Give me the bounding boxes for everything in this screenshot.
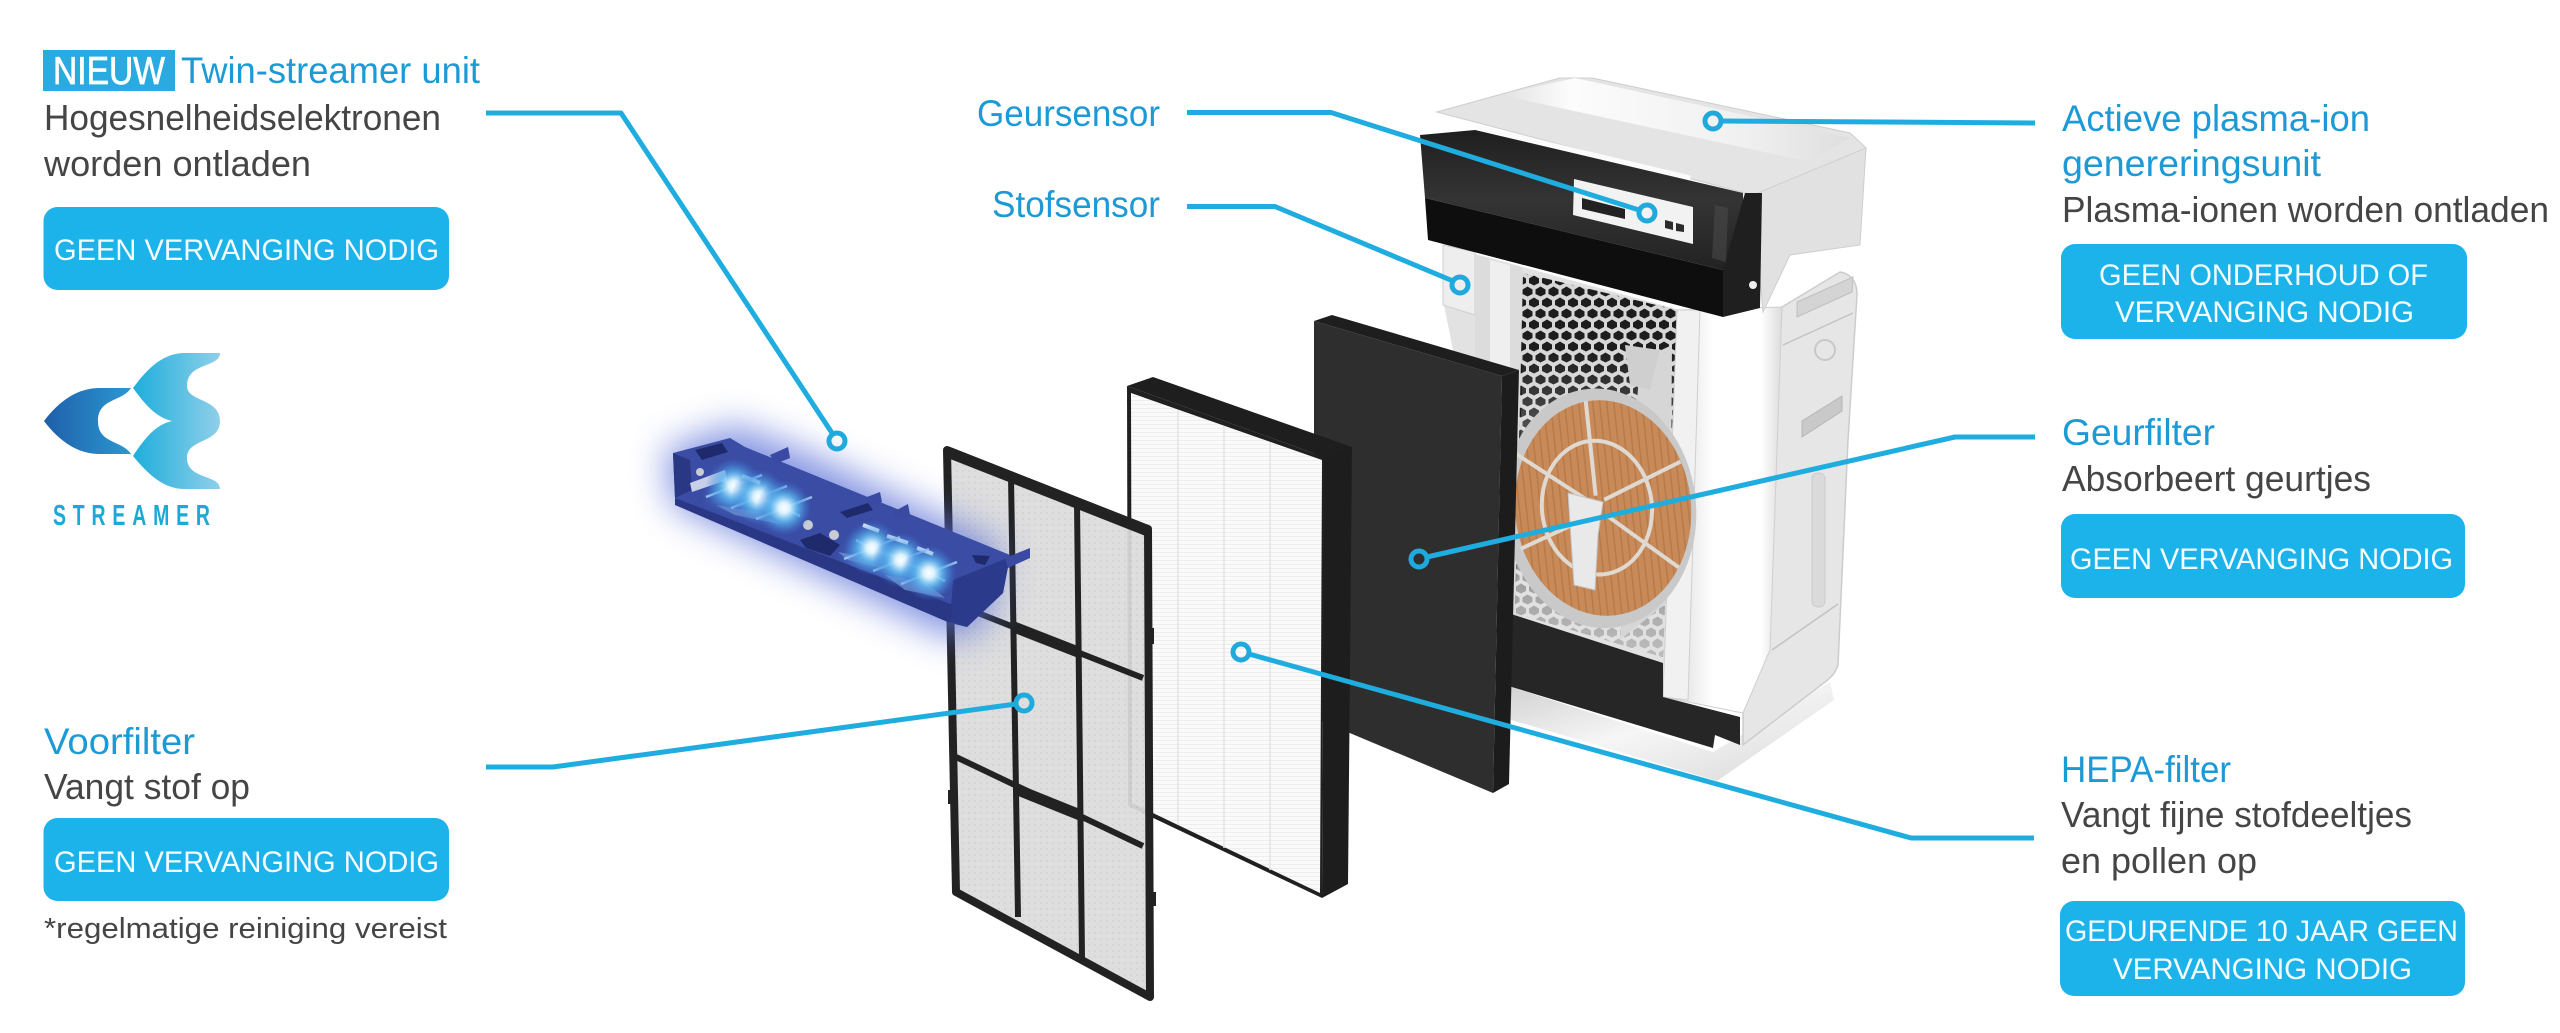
streamer slots: [695, 443, 990, 565]
streamer right end: [950, 557, 1010, 627]
button: VERVANGING NODIG: [2115, 296, 2414, 329]
display panel: [1573, 179, 1693, 244]
streamer pins: [696, 468, 839, 540]
odour filter disc: [1492, 379, 1708, 638]
leader line: geursensor: [1187, 112, 1655, 221]
button: GEDURENDE 10 JAAR GEEN: [2065, 915, 2458, 948]
streamer body: [673, 438, 1010, 627]
illustration: carbon odour filter: [1314, 315, 1519, 793]
heading: Twin-streamer unit: [181, 50, 481, 91]
description: Plasma-ionen worden ontladen: [2062, 189, 2549, 230]
label: stofsensor: Stofsensor: [992, 184, 1160, 225]
HEPA front frame: [1127, 386, 1324, 898]
HEPA side frame: [1322, 447, 1352, 898]
streamer light stars: [706, 458, 957, 601]
lid recess: [1500, 78, 1850, 162]
button: VERVANGING NODIG: [2113, 953, 2412, 986]
right interior strip: [1663, 310, 1700, 700]
heading: Actieve plasma-ion: [2062, 98, 2370, 139]
illustration: pre-filter: [947, 450, 1156, 997]
leader line: plasma-ion: [1705, 113, 2035, 129]
pre-filter thick segments: [950, 453, 1148, 815]
logo right fins: [133, 353, 220, 489]
button: GEEN ONDERHOUD OF: [2099, 259, 2428, 292]
heading: genereringsunit: [2062, 143, 2322, 184]
hexagonal mesh: [1515, 273, 1677, 657]
button: [44, 818, 449, 901]
side handles and seams: [1772, 277, 1853, 650]
HEPA top frame: [1127, 377, 1352, 457]
label: geursensor: Geursensor: [977, 93, 1160, 134]
callout: voorfilter: [44, 721, 449, 945]
streamer tabs: [770, 447, 1030, 568]
logo wordmark: STREAMER: [53, 501, 210, 532]
lid top surface: [1437, 78, 1866, 195]
hinge screw: [1749, 281, 1757, 289]
streamer glow: [665, 425, 1000, 640]
black head upper: [1420, 130, 1745, 270]
purifier side panel: [1743, 272, 1857, 745]
heading: HEPA-filter: [2061, 749, 2231, 790]
illustration: twin-streamer unit: [665, 425, 1030, 640]
leader line: HEPA-filter: [1233, 644, 2034, 838]
heading: Voorfilter: [44, 721, 195, 762]
carbon front face: [1314, 321, 1502, 793]
duct bracket: [1620, 345, 1672, 640]
description: Hogesnelheidselektronen: [44, 97, 441, 138]
streamer window: [690, 470, 727, 492]
carbon side edge: [1493, 370, 1519, 793]
leader line: geurfilter: [1411, 437, 2035, 567]
heading: Geurfilter: [2062, 412, 2215, 453]
button: [44, 207, 449, 290]
button: GEEN VERVANGING NODIG: [2070, 543, 2453, 576]
description: en pollen op: [2061, 840, 2257, 881]
description: Vangt stof op: [44, 766, 250, 807]
icon: streamer logo: [44, 353, 220, 532]
new badge: NIEUW: [53, 50, 165, 93]
black tray: [1505, 612, 1740, 748]
purifier base: [1505, 682, 1834, 781]
description: [2061, 794, 2412, 881]
sensor housing: [1443, 245, 1475, 315]
pre-filter bars: [950, 477, 1143, 958]
pre-filter clips: [948, 628, 1156, 906]
pre-filter mesh: [947, 450, 1150, 997]
description: worden ontladen: [43, 143, 311, 184]
central bracket: [1568, 493, 1603, 590]
black head side: [1723, 193, 1762, 317]
button: [2060, 901, 2465, 996]
description: Vangt fijne stofdeeltjes: [2061, 794, 2412, 835]
leader line: stofsensor: [1187, 206, 1468, 293]
streamer lit band: [710, 478, 945, 592]
callout: actieve plasma-ion: [2061, 98, 2549, 339]
top lid: [1437, 78, 1866, 312]
streamer light rays: [706, 475, 957, 584]
leader line: twin-streamer: [486, 113, 845, 449]
HEPA pleated media: [1131, 393, 1322, 893]
streamer front rail: [675, 498, 953, 623]
footnote: *regelmatige reiniging vereist: [44, 913, 447, 945]
interior left rail: [1475, 255, 1523, 620]
button: [2061, 514, 2465, 598]
heading: [2062, 98, 2370, 184]
description: [43, 97, 441, 184]
leader line: voorfilter: [486, 695, 1032, 767]
button: GEEN VERVANGING NODIG: [54, 234, 439, 267]
streamer lower windows: [716, 505, 945, 598]
display digits: [1582, 198, 1625, 219]
callout: geurfilter: [2061, 412, 2465, 598]
mesh fade: [1515, 350, 1677, 657]
black head recess: [1425, 198, 1723, 317]
purifier front column: [1663, 307, 1782, 713]
illustration: air purifier body: [1420, 78, 1866, 781]
button: GEEN VERVANGING NODIG: [54, 846, 439, 879]
illustration: HEPA filter: [1127, 377, 1352, 898]
purifier interior: [1443, 245, 1680, 700]
description: Absorbeert geurtjes: [2062, 458, 2371, 499]
pre-filter frame: [947, 450, 1150, 997]
callout: HEPA-filter: [2060, 749, 2465, 996]
callout: twin-streamer unit: [43, 50, 481, 290]
lid front lip: [1475, 128, 1690, 179]
streamer light dashes: [742, 476, 933, 554]
streamer left end: [673, 453, 692, 498]
display buttons: [1665, 220, 1684, 232]
logo left fin: [44, 388, 131, 454]
head corner highlight: [1712, 205, 1728, 262]
button: [2061, 244, 2467, 339]
carbon top edge: [1314, 315, 1519, 376]
